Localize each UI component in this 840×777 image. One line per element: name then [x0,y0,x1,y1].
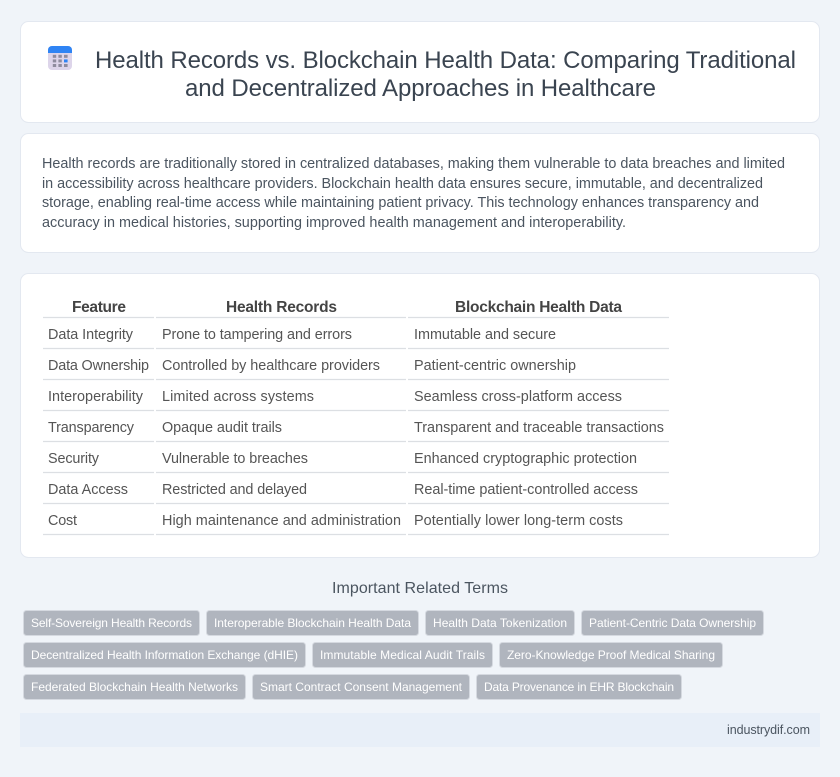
tags: related terms [24,610,764,700]
table row: interoperability: Limited across systems [162,389,314,405]
footer: industrydif.com [727,723,810,737]
table row: data integrity [48,327,556,343]
table row: interoperability: Interoperability [48,389,144,405]
table row: data integrity: Data Integrity [48,327,134,343]
text block: summary: accuracy in medical histories, supporting improved health management and interoperability. [42,215,626,231]
text block: summary: Health records are traditionally stored in centralized databases, making them vulnerable to data breaches and limited [42,156,785,172]
table row: data ownership: Patient-centric ownership [414,358,576,374]
table row: data access: Data Access [48,482,128,498]
tags: related terms: Federated Blockchain Health Networks [31,680,238,694]
table row: security: Security [48,451,100,467]
table row: cost: Cost [48,513,77,529]
table header [72,299,622,316]
title [95,47,796,102]
table row: data ownership: Controlled by healthcare providers [162,358,380,374]
title: Health Records vs. Blockchain Health Data: Comparing Traditional [95,47,796,74]
table row: cost: High maintenance and administration [162,513,401,529]
table row: security: Vulnerable to breaches [162,451,308,467]
tags: related terms: Interoperable Blockchain Health Data [214,616,411,630]
table row: data access: Real-time patient-controlled access [414,482,638,498]
table row: transparency: Transparent and traceable transactions [414,420,664,436]
table row: interoperability: Seamless cross-platform access [414,389,622,405]
tags: related terms: Data Provenance in EHR Blockchain [484,680,674,694]
text block: summary: in accessibility across healthcare providers. Blockchain health data ensures secure, immutable, and decentralized [42,176,763,192]
table header: Feature [72,299,126,316]
table row: data integrity: Immutable and secure [414,327,556,343]
tags: related terms: Zero-Knowledge Proof Medical Sharing [507,648,715,662]
tags: related terms: Immutable Medical Audit Trails [320,648,485,662]
tags: related terms: Decentralized Health Information Exchange (dHIE) [31,648,298,662]
text block: summary [42,156,785,231]
table row: security [48,451,637,467]
table row: data ownership [48,358,576,374]
panel: title card [20,22,820,122]
panel: comparison table [20,274,820,558]
table row: transparency: Transparency [48,420,135,436]
tags: related terms: Self-Sovereign Health Records [31,616,192,630]
table row: transparency: Opaque audit trails [162,420,282,436]
tags: related terms: Patient-Centric Data Ownership [589,616,756,630]
table row: data ownership: Data Ownership [48,358,149,374]
icon: calendar [48,46,72,70]
table header: Health Records [226,299,337,316]
table row: data integrity: Prone to tampering and errors [162,327,352,343]
footer [20,713,820,747]
table row: interoperability [48,389,622,405]
table row: data access: Restricted and delayed [162,482,307,498]
panel: summary paragraph [20,134,820,252]
table row: cost: Potentially lower long-term costs [414,513,623,529]
table row: data access [48,482,638,498]
table row: cost [48,513,623,529]
tags: related terms: Smart Contract Consent Management [260,680,463,694]
heading: related terms: Important Related Terms [332,580,508,597]
title: and Decentralized Approaches in Healthcare [185,75,656,102]
text block: summary: storage, enabling real-time access while maintaining patient privacy. This technology enhances transparency and [42,195,759,211]
table header: Blockchain Health Data [455,299,622,316]
table row: security: Enhanced cryptographic protection [414,451,637,467]
tags: related terms: Health Data Tokenization [433,616,567,630]
table row: transparency [48,420,664,436]
